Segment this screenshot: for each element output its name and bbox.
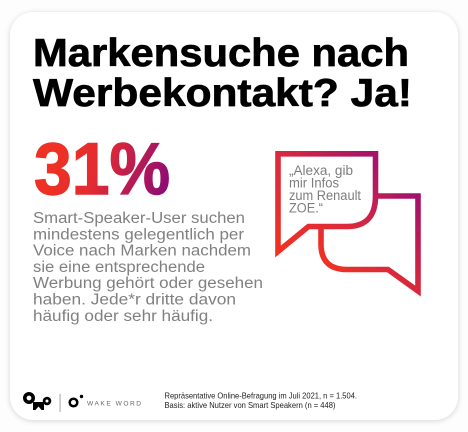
divider between logos <box>59 394 62 412</box>
body text <box>33 210 263 325</box>
title: Werbekontakt? Ja! <box>33 72 412 115</box>
body text: mindestens gelegentlich per <box>33 226 244 243</box>
footnote: Repräsentative Online-Befragung im Juli 2021, n = 1.504. <box>164 390 357 400</box>
logo: Wake Word <box>70 395 141 408</box>
big number: 31%: 31% <box>34 129 170 210</box>
body text: Smart-Speaker-User suchen <box>33 210 245 227</box>
back speech bubble <box>321 196 418 291</box>
logo: OMP <box>25 394 50 410</box>
body text: haben. Jede*r dritte davon <box>33 292 236 308</box>
bubble quote: ZOE.“ <box>289 200 323 215</box>
footnote <box>164 390 357 410</box>
body text: sie eine entsprechende <box>33 259 205 276</box>
title: Markensuche nach <box>33 32 409 75</box>
body text: Werbung gehört oder gesehen <box>33 275 263 292</box>
body text: häufig oder sehr häufig. <box>33 308 213 325</box>
footnote: Basis: aktive Nutzer von Smart Speakern (n = 448) <box>164 400 336 410</box>
icon: speech bubbles <box>278 154 418 291</box>
logo: Wake Word: WAKE WORD <box>87 400 141 408</box>
bubble quote: mir Infos <box>289 176 339 190</box>
front speech bubble <box>278 154 376 252</box>
bubble quote <box>289 163 361 215</box>
bubble quote: zum Renault <box>289 188 361 203</box>
body text: Voice nach Marken nachdem <box>33 243 251 260</box>
bubble quote: „Alexa, gib <box>289 163 353 178</box>
title <box>33 32 412 115</box>
